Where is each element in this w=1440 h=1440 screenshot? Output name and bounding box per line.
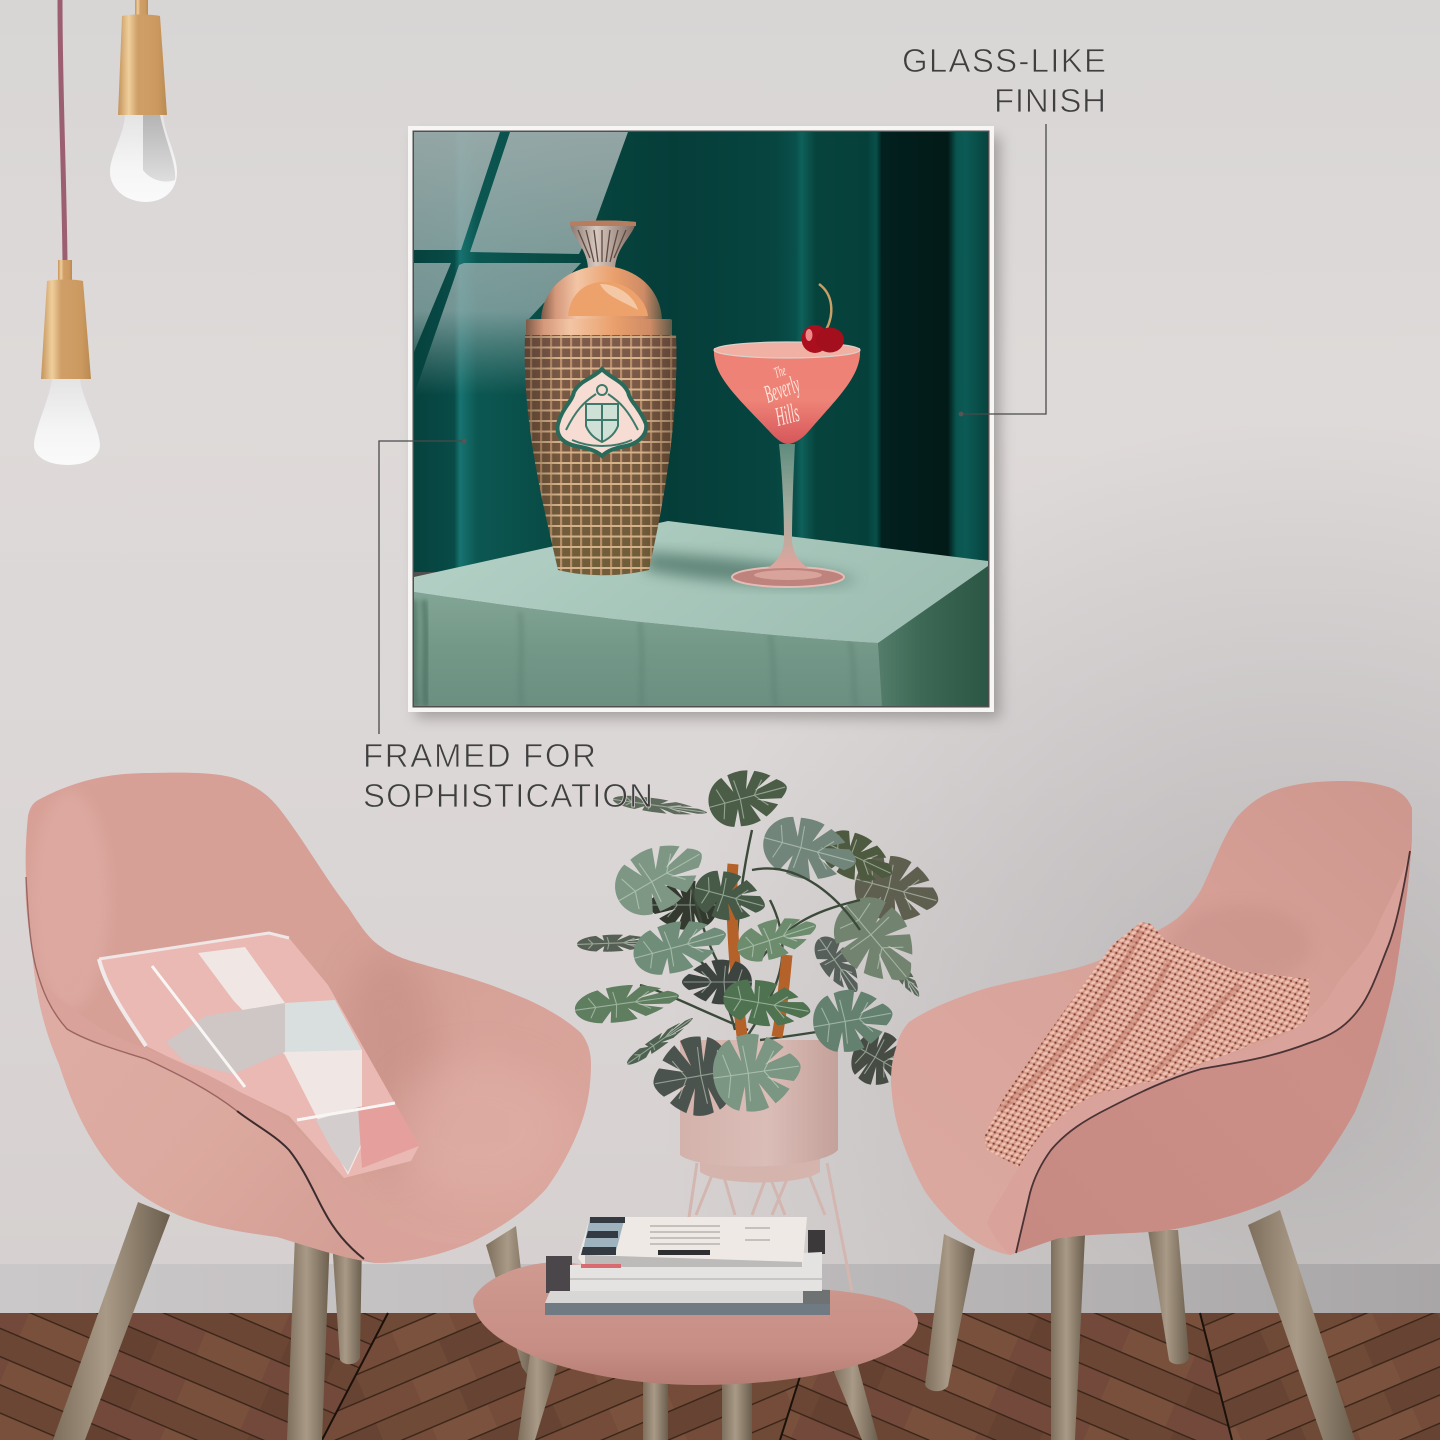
inner frame edge	[412, 130, 990, 708]
glass stem	[768, 444, 808, 568]
right chair rim	[987, 851, 1410, 1255]
upper lamp	[110, 0, 177, 202]
back shading	[39, 801, 101, 1000]
framed artwork	[414, 132, 988, 706]
wooden herringbone floor	[0, 1313, 1440, 1440]
left chair rim	[36, 968, 474, 1263]
stool legs	[518, 1354, 878, 1440]
right chair	[880, 770, 1440, 1440]
monstera leaves, front layer	[573, 827, 918, 1123]
cocktail shaker	[520, 220, 682, 580]
glass bowl	[714, 348, 860, 444]
stool seat	[473, 1262, 918, 1385]
left chair shell	[26, 772, 591, 1263]
top book title strip	[658, 1250, 710, 1255]
frame shadow	[416, 136, 1000, 718]
stool	[473, 1217, 918, 1440]
third book	[545, 1291, 803, 1303]
red spine	[581, 1264, 621, 1268]
second book	[570, 1252, 822, 1291]
top book	[578, 1217, 807, 1267]
wall shading on the right side	[600, 420, 1440, 1265]
plaid cushion	[99, 933, 419, 1178]
table cloth front	[414, 592, 884, 706]
table top	[414, 521, 988, 643]
plant stand	[682, 1163, 852, 1291]
callout text: sophistication: SOPHISTICATION	[363, 777, 653, 814]
left chair	[25, 772, 591, 1440]
right chair front shell	[1016, 834, 1412, 1253]
pendant lamps	[34, 0, 177, 465]
stack of books	[545, 1217, 830, 1315]
table cloth side	[878, 566, 988, 706]
callout text: framed for: FRAMED FOR	[363, 737, 596, 774]
plant stems	[640, 830, 860, 1040]
table shadow	[645, 552, 860, 585]
glass lettering	[764, 366, 800, 426]
monstera leaves, back layer	[577, 760, 946, 1001]
right chair piping	[1016, 851, 1410, 1253]
cocktail glass	[714, 284, 860, 587]
knit cushion	[984, 922, 1310, 1167]
glass foot	[732, 567, 844, 587]
bottom book	[545, 1303, 830, 1315]
right stack side	[803, 1290, 830, 1304]
shaker dome	[541, 266, 662, 322]
glass lettering: Hills	[772, 397, 802, 432]
moss poles	[732, 864, 787, 1037]
lower lamp	[34, 260, 100, 465]
lamp cord	[60, 0, 65, 262]
plant pot	[680, 1040, 838, 1182]
left chair piping	[26, 877, 237, 1111]
cherry	[802, 284, 844, 353]
top book spine art	[582, 1217, 625, 1255]
callout leader: framed for sophistication	[379, 439, 466, 734]
left chair front shell	[26, 877, 376, 1263]
shaker crest badge	[557, 369, 646, 456]
callout text: glass-like finish: GLASS-LIKE	[902, 42, 1106, 79]
glass lettering: The	[772, 361, 789, 382]
glass reflection	[414, 132, 628, 395]
velvet curtain	[414, 132, 988, 572]
white frame	[408, 126, 994, 712]
left chair legs	[53, 1202, 534, 1440]
baseboard	[0, 1264, 1440, 1314]
right chair shell	[891, 781, 1412, 1255]
dark book, rear right	[808, 1230, 825, 1254]
dark book, rear left	[546, 1256, 572, 1293]
shaker body	[520, 330, 682, 580]
glass lettering: Beverly	[761, 370, 804, 409]
callout leader: glass-like finish	[959, 124, 1046, 416]
shaker neck	[570, 220, 636, 268]
right chair legs	[925, 1210, 1355, 1440]
shaker band	[526, 319, 672, 336]
callout text: finish: FINISH	[994, 82, 1106, 119]
potted plant	[573, 760, 946, 1291]
